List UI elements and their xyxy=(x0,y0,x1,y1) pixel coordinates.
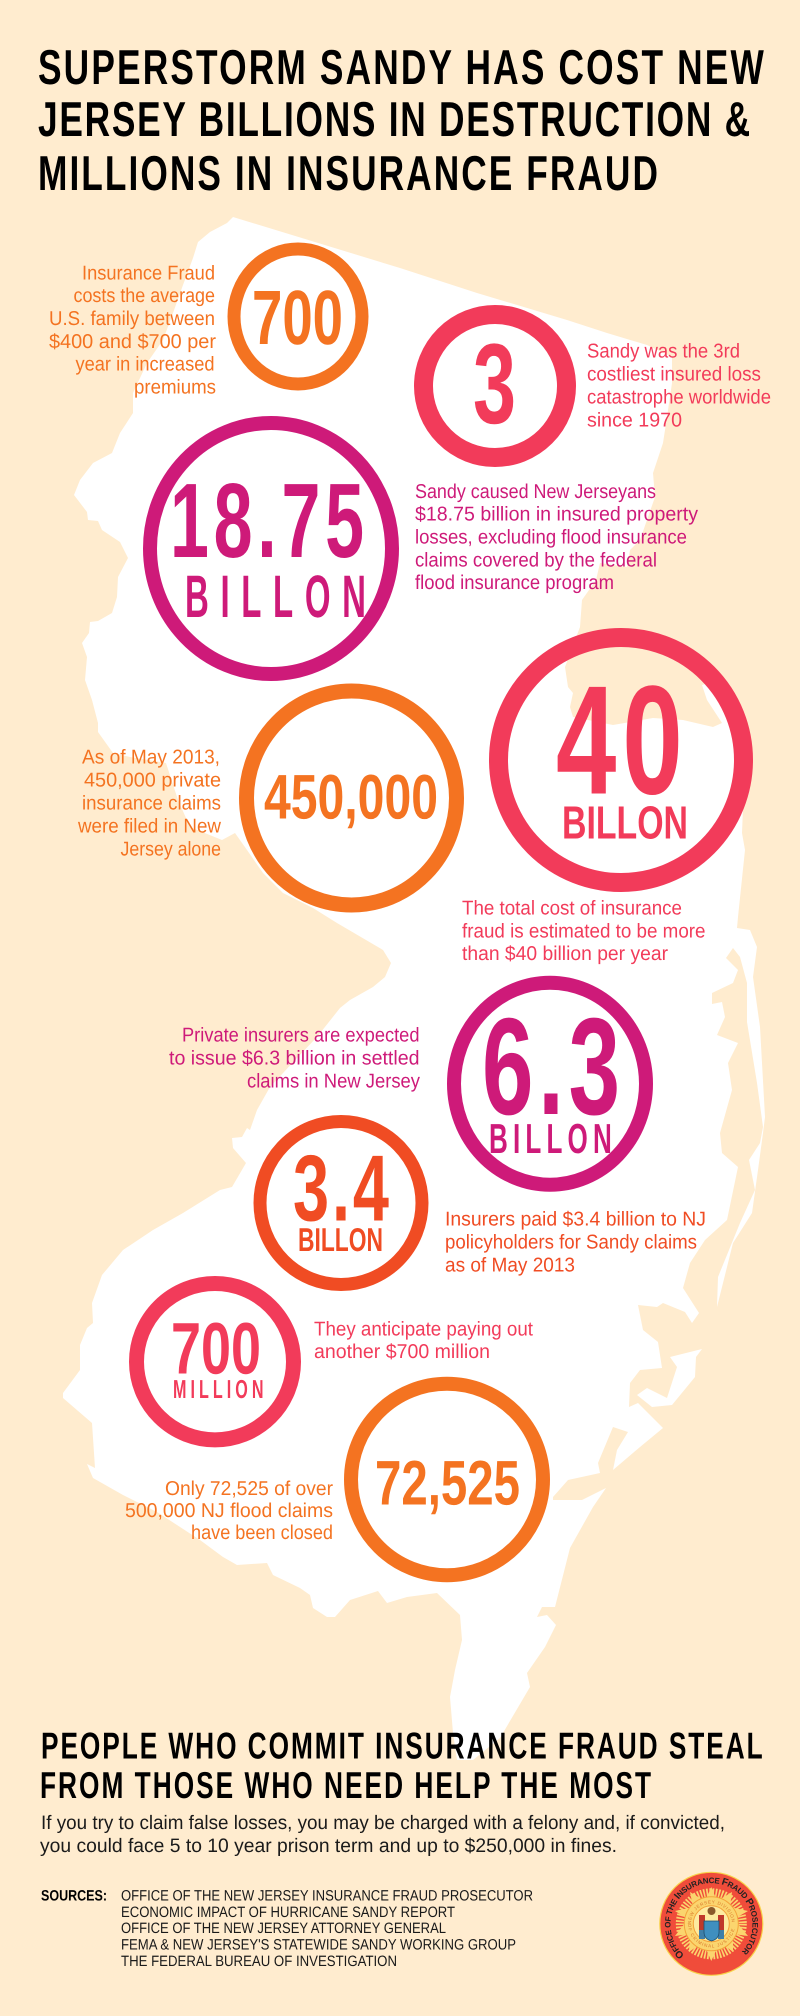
seal: Office of the Insurance Fraud Prosecutor: NEW JERSEY DIVISION xyxy=(688,1900,735,1924)
description: 450,000 claims: As of May 2013, xyxy=(82,746,220,768)
ring: 3 xyxy=(424,314,566,458)
ring: 450,000 xyxy=(246,691,456,905)
description: 18.75 billion xyxy=(415,481,698,594)
ring: 3.4 billion: 3.4 xyxy=(293,1136,389,1240)
seal: Office of the Insurance Fraud Prosecutor: OF CRIMINAL JUSTICE xyxy=(688,1924,734,1948)
description: 700 premiums: costs the average xyxy=(74,285,215,307)
description: 18.75 billion: $18.75 billion in insured property xyxy=(415,504,698,526)
description: 700 premiums: $400 and $700 per xyxy=(49,331,216,353)
ring: 40 billion: 40 xyxy=(556,654,683,826)
seal: Office of the Insurance Fraud Prosecutor: OFFICE OF THE INSURANCE FRAUD PROSECUTOR xyxy=(664,1878,758,1958)
description: 40 billion: than $40 billion per year xyxy=(462,943,668,965)
description: 450,000 claims xyxy=(77,746,222,860)
sources list: THE FEDERAL BUREAU OF INVESTIGATION xyxy=(121,1953,397,1970)
description: 72,525 closed xyxy=(125,1478,333,1544)
stat: 700 premiums xyxy=(49,249,362,398)
ring: 6.3 billion: BILLON xyxy=(489,1115,612,1162)
description: 40 billion: fraud is estimated to be more xyxy=(462,920,706,942)
ring: 72,525: 72,525 xyxy=(375,1448,520,1518)
description: 72,525 closed: Only 72,525 of over xyxy=(165,1478,333,1500)
closing paragraph: you could face 5 to 10 year prison term and up to $250,000 in fines. xyxy=(40,1835,617,1857)
description: 72,525 closed: have been closed xyxy=(191,1522,333,1544)
ring: 6.3 billion: 6.3 xyxy=(482,990,620,1144)
description: 450,000 claims: Jersey alone xyxy=(120,838,221,860)
description: 450,000 claims: were filed in New xyxy=(77,816,222,838)
stat: 40 billion xyxy=(462,638,744,965)
sources list: ECONOMIC IMPACT OF HURRICANE SANDY REPORT xyxy=(121,1904,455,1921)
sources list xyxy=(121,1888,533,1970)
ring: 72,525 xyxy=(351,1384,543,1575)
ring: 700 million: MILLION xyxy=(173,1374,264,1404)
sources list: OFFICE OF THE NEW JERSEY ATTORNEY GENERAL xyxy=(121,1920,446,1937)
description: 700 million xyxy=(314,1318,533,1363)
ring: 40 billion: BILLON xyxy=(562,796,688,848)
description: 3rd costliest xyxy=(587,340,771,432)
description: 6.3 billion: claims in New Jersey xyxy=(247,1070,420,1092)
title xyxy=(38,41,764,201)
ring: 3: 3 xyxy=(473,321,516,448)
description: 18.75 billion: Sandy caused New Jerseyans xyxy=(415,481,656,503)
sources list: FEMA & NEW JERSEY'S STATEWIDE SANDY WORKING GROUP xyxy=(121,1936,516,1954)
closing paragraph xyxy=(40,1812,725,1857)
sources list: OFFICE OF THE NEW JERSEY INSURANCE FRAUD PROSECUTOR xyxy=(121,1888,533,1904)
stat: 3.4 billion xyxy=(260,1122,706,1284)
ring: 40 billion xyxy=(498,638,744,882)
description: 6.3 billion xyxy=(169,1024,420,1092)
ring: 450,000: 450,000 xyxy=(264,762,438,832)
description: 700 premiums xyxy=(49,262,216,398)
description: 700 premiums: U.S. family between xyxy=(49,308,215,330)
description: 700 million: They anticipate paying out xyxy=(314,1318,533,1340)
description: 18.75 billion: flood insurance program xyxy=(415,572,614,594)
description: 450,000 claims: insurance claims xyxy=(82,792,221,814)
description: 72,525 closed: 500,000 NJ flood claims xyxy=(125,1500,333,1522)
map of New Jersey silhouette xyxy=(63,217,765,1760)
title: SUPERSTORM SANDY HAS COST NEW xyxy=(38,41,764,95)
stat: 3rd costliest xyxy=(424,314,771,458)
description: 18.75 billion: claims covered by the federal xyxy=(415,550,657,572)
stat: 6.3 billion xyxy=(169,983,646,1185)
ring: 18.75 billion: 18.75 xyxy=(170,462,364,580)
stat: 18.75 billion xyxy=(150,423,698,674)
closing heading: FROM THOSE WHO NEED HELP THE MOST xyxy=(40,1764,651,1806)
title: MILLIONS IN INSURANCE FRAUD xyxy=(38,147,658,201)
ring: 3.4 billion xyxy=(260,1122,422,1284)
title: JERSEY BILLIONS IN DESTRUCTION & xyxy=(38,93,750,147)
description: 3.4 billion xyxy=(445,1208,706,1276)
description: 700 premiums: year in increased xyxy=(76,354,214,376)
description: 700 premiums: Insurance Fraud xyxy=(82,262,215,284)
description: 18.75 billion: losses, excluding flood insurance xyxy=(415,526,687,548)
closing heading: PEOPLE WHO COMMIT INSURANCE FRAUD STEAL xyxy=(41,1724,763,1766)
description: 3.4 billion: policyholders for Sandy claims xyxy=(445,1232,697,1254)
ring: 700 million xyxy=(136,1284,294,1440)
description: 3rd costliest: since 1970 xyxy=(587,410,682,432)
ring: 700 million: 700 xyxy=(171,1308,261,1390)
closing paragraph: If you try to claim false losses, you may be charged with a felony and, if convicted, xyxy=(41,1812,725,1834)
sources label: SOURCES: xyxy=(41,1888,107,1904)
description: 700 premiums: premiums xyxy=(134,376,216,398)
description: 700 million: another $700 million xyxy=(314,1341,490,1363)
description: 3rd costliest: costliest insured loss xyxy=(587,364,761,386)
ring: 18.75 billion: BILLON xyxy=(185,563,366,630)
description: 6.3 billion: Private insurers are expected xyxy=(182,1024,420,1046)
description: 3.4 billion: as of May 2013 xyxy=(445,1254,575,1276)
ring: 18.75 billion xyxy=(150,423,392,674)
ring: 700 xyxy=(234,249,362,384)
description: 3rd costliest: catastrophe worldwide xyxy=(587,386,771,408)
stat: 700 million xyxy=(136,1284,533,1440)
description: 3rd costliest: Sandy was the 3rd xyxy=(587,340,740,362)
stat: 450,000 claims xyxy=(77,691,457,905)
ring: 3.4 billion: BILLON xyxy=(298,1221,383,1258)
description: 450,000 claims: 450,000 private xyxy=(84,770,221,792)
stat: 72,525 closed xyxy=(125,1384,543,1575)
description: 3.4 billion: Insurers paid $3.4 billion to NJ xyxy=(445,1208,706,1230)
ring: 6.3 billion xyxy=(454,983,646,1185)
ring: 700: 700 xyxy=(252,275,343,361)
closing heading xyxy=(40,1724,763,1806)
description: 40 billion xyxy=(462,898,706,965)
description: 6.3 billion: to issue $6.3 billion in settled xyxy=(169,1048,420,1070)
description: 40 billion: The total cost of insurance xyxy=(462,898,682,920)
